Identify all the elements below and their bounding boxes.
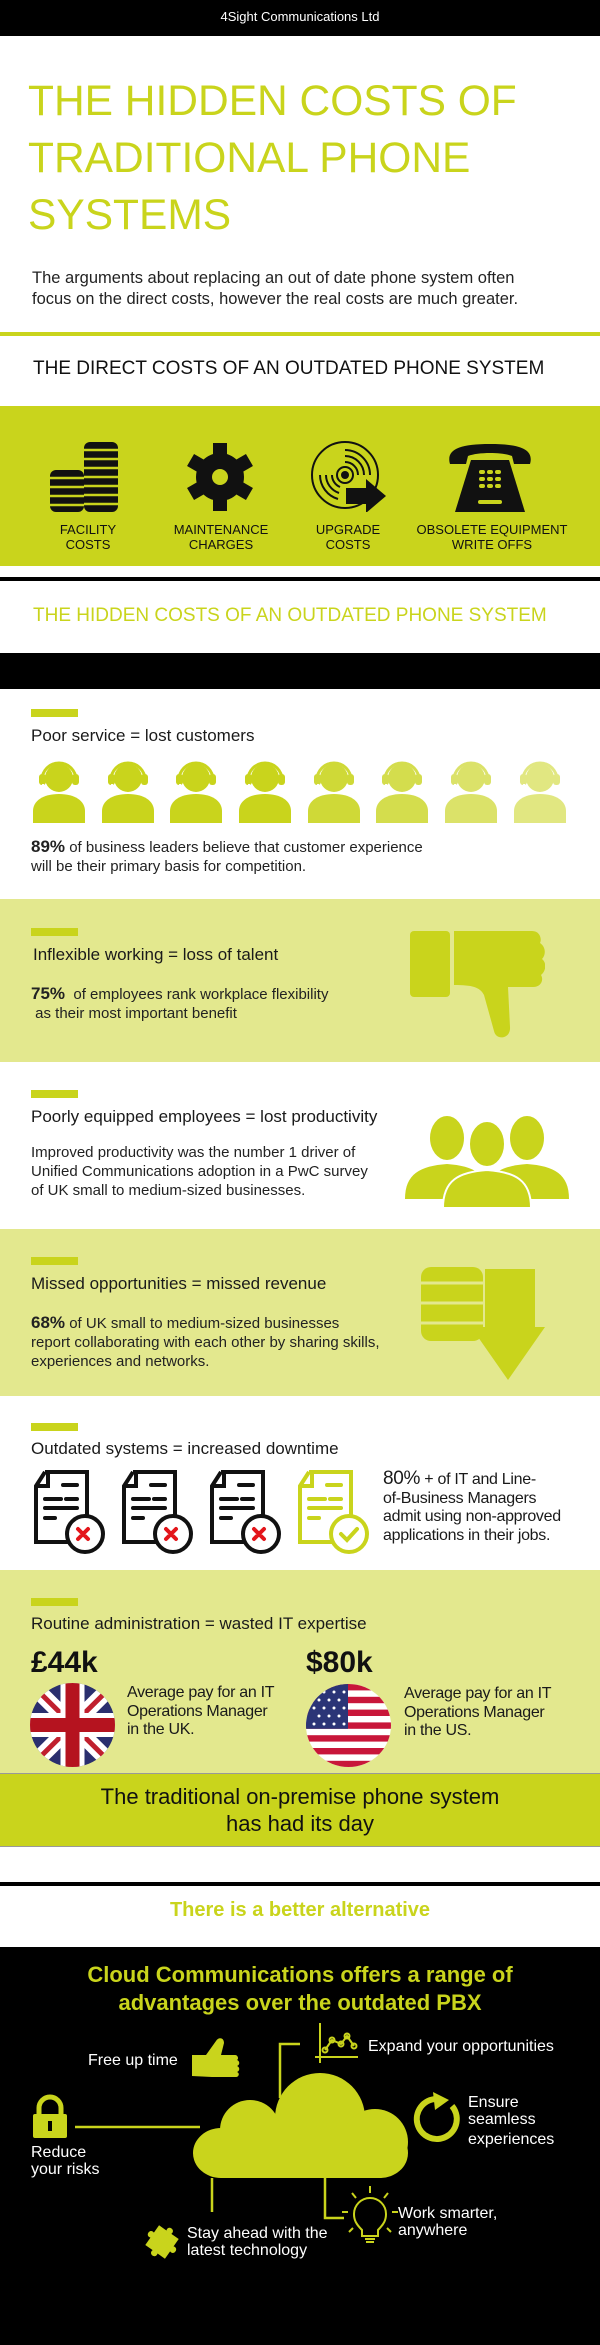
stat: 75%: as their most important benefit xyxy=(35,1005,237,1022)
icon: US flag xyxy=(306,1684,391,1767)
stat: 80%: 80% + of IT and Line- xyxy=(383,1468,536,1489)
stat: 68%: report collaborating with each other by sharing skills, xyxy=(31,1334,380,1351)
stat: $80k: $80k xyxy=(306,1646,373,1679)
panel: poorly equipped xyxy=(0,1062,600,1229)
text: Unified Communications adoption in a PwC survey xyxy=(31,1163,368,1180)
icon: upgrade disc xyxy=(311,441,386,512)
text xyxy=(31,1144,368,1199)
labels: latest technology xyxy=(187,2242,307,2259)
title: TRADITIONAL PHONE xyxy=(28,135,470,182)
labels: Ensure xyxy=(468,2094,519,2111)
labels: seamless xyxy=(468,2111,536,2128)
label: facility costs xyxy=(60,522,116,552)
labels: your risks xyxy=(31,2161,99,2178)
labels: experiences xyxy=(468,2131,554,2148)
icon: coins xyxy=(50,442,118,512)
intro text: The arguments about replacing an out of date phone system often xyxy=(32,269,514,287)
labels: Stay ahead with the xyxy=(187,2225,328,2242)
heading: Poorly equipped employees = lost productivity xyxy=(31,1107,377,1126)
stat: 75%: 75% of employees rank workplace flexibility xyxy=(31,984,328,1003)
heading: hidden costs: THE HIDDEN COSTS OF AN OUTDATED PHONE SYSTEM xyxy=(33,605,547,626)
text: of UK small to medium-sized businesses. xyxy=(31,1182,305,1199)
icon: chart xyxy=(315,2023,358,2063)
label: facility costs: FACILITY xyxy=(60,522,116,537)
text: US pay: Average pay for an IT xyxy=(404,1685,551,1702)
text: UK pay: Operations Manager xyxy=(127,1702,267,1720)
text: US pay: in the US. xyxy=(404,1722,471,1739)
icon: telephone xyxy=(449,444,531,512)
label: obsolete equipment xyxy=(416,522,568,552)
cloud xyxy=(193,2073,408,2178)
panel: poor service xyxy=(0,689,600,899)
heading: cloud communications: Cloud Communications offers a range of xyxy=(87,1962,513,1987)
labels: Work smarter, xyxy=(398,2205,497,2222)
icon: lock xyxy=(33,2097,67,2138)
heading: better alternative: There is a better alternative xyxy=(170,1899,430,1921)
label: maintenance charges xyxy=(174,522,268,552)
heading: cloud communications: advantages over the outdated PBX xyxy=(118,1990,482,2015)
text: UK pay: in the UK. xyxy=(127,1721,194,1738)
labels: Free up time xyxy=(88,2052,178,2069)
icon: database with arrow xyxy=(421,1267,545,1380)
stat: £44k: £44k xyxy=(31,1646,98,1679)
icon: three people xyxy=(405,1116,569,1207)
icons: documents xyxy=(34,1470,369,1554)
banner: has had its day xyxy=(0,1773,600,1847)
header bar xyxy=(0,0,600,36)
label: upgrade costs: UPGRADE xyxy=(316,522,380,537)
label: obsolete equipment: OBSOLETE EQUIPMENT xyxy=(416,522,567,537)
text: US pay: Operations Manager xyxy=(404,1704,544,1720)
stat: 89%: 89% of business leaders believe that customer experience xyxy=(31,837,423,856)
icon: thumbs up xyxy=(192,2038,239,2077)
labels: anywhere xyxy=(398,2222,467,2239)
labels: Reduce xyxy=(31,2144,86,2161)
stat: 80%: of-Business Managers xyxy=(383,1490,536,1506)
panel: routine administration xyxy=(0,1570,600,1773)
label: facility costs: COSTS xyxy=(66,537,110,552)
title: THE HIDDEN COSTS OF xyxy=(28,78,517,125)
stat: 89% xyxy=(31,837,423,875)
heading: Routine administration = wasted IT expertise xyxy=(31,1614,367,1633)
panel: direct costs xyxy=(0,406,600,566)
heading: poor service: Poor service = lost customers xyxy=(31,726,254,745)
label: upgrade costs xyxy=(316,522,380,552)
stat: 89%: will be their primary basis for competition. xyxy=(31,858,306,875)
heading: Inflexible working = loss of talent xyxy=(33,945,278,964)
stat: 80%: admit using non-approved xyxy=(383,1508,561,1525)
heading: direct costs: THE DIRECT COSTS OF AN OUTDATED PHONE SYSTEM xyxy=(33,358,544,379)
label: upgrade costs: COSTS xyxy=(326,537,370,552)
text: UK pay xyxy=(127,1684,274,1738)
banner: has had its day: The traditional on-premise phone system xyxy=(101,1784,499,1809)
label: maintenance charges: MAINTENANCE xyxy=(174,522,268,537)
panel: inflexible working xyxy=(0,899,600,1062)
icon: UK flag xyxy=(30,1683,115,1767)
icon: puzzle xyxy=(139,2219,185,2265)
title xyxy=(28,78,517,239)
stat: 75% xyxy=(31,984,328,1022)
stat: 80% xyxy=(383,1468,561,1544)
panel: cloud advantages xyxy=(0,1947,600,2345)
banner: has had its day: has had its day xyxy=(226,1811,374,1836)
heading: cloud communications xyxy=(87,1962,513,2015)
stat: 80%: applications in their jobs. xyxy=(383,1526,550,1544)
heading: Outdated systems = increased downtime xyxy=(31,1439,339,1458)
intro text xyxy=(32,269,518,308)
text: Improved productivity was the number 1 driver of xyxy=(31,1144,355,1161)
text: UK pay: Average pay for an IT xyxy=(127,1684,274,1701)
panel: missed opportunities xyxy=(0,1229,600,1396)
icon: gear xyxy=(187,443,253,511)
cloud diagram xyxy=(31,2023,554,2259)
intro text: focus on the direct costs, however the real costs are much greater. xyxy=(32,290,518,308)
heading: Missed opportunities = missed revenue xyxy=(31,1274,326,1293)
stat: 68%: experiences and networks. xyxy=(31,1353,209,1370)
stat: 68%: 68% of UK small to medium-sized businesses xyxy=(31,1313,339,1332)
icons: headset agents xyxy=(33,762,566,823)
icon: light bulb xyxy=(342,2186,398,2242)
label: obsolete equipment: WRITE OFFS xyxy=(452,537,532,552)
panel: outdated systems xyxy=(0,1396,600,1570)
stat: 68% xyxy=(31,1313,380,1370)
header bar: 4Sight Communications Ltd xyxy=(220,9,379,24)
text: US pay xyxy=(404,1685,552,1739)
icon: thumbs down xyxy=(410,931,545,1038)
icon: refresh arrow xyxy=(417,2092,457,2139)
labels xyxy=(31,2038,554,2259)
label: maintenance charges: CHARGES xyxy=(189,537,253,552)
labels: Expand your opportunities xyxy=(368,2038,554,2055)
connectors xyxy=(75,2044,344,2218)
title: SYSTEMS xyxy=(28,192,231,239)
